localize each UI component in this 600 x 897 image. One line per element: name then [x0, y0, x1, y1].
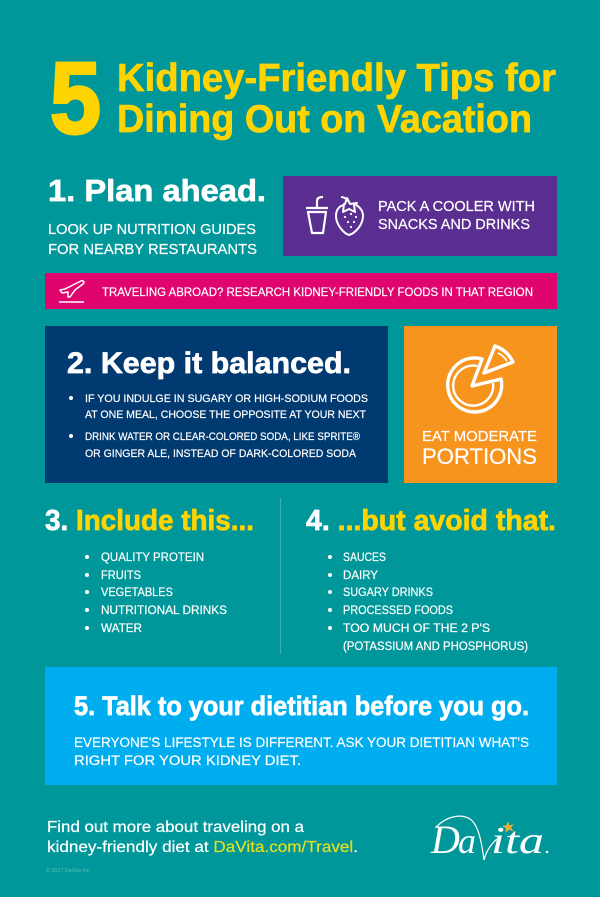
- body: RIGHT FOR YOUR KIDNEY DIET.: [74, 753, 301, 768]
- body: EVERYONE'S LIFESTYLE IS DIFFERENT. ASK YOUR DIETITIAN WHAT'S: [74, 735, 529, 750]
- heading: 4. ...but avoid that.: [306, 505, 556, 537]
- icon: star: [502, 821, 514, 833]
- copyright: © 2017 DaVita Inc.: [46, 867, 91, 874]
- list: WATER: [101, 623, 142, 635]
- list: PROCESSED FOODS: [343, 605, 453, 617]
- list: VEGETABLES: [101, 587, 173, 599]
- footer call to action: [47, 819, 358, 856]
- tip 1 text: 1. Plan ahead.: [48, 173, 266, 208]
- bullet list: IF YOU INDULGE IN SUGARY OR HIGH-SODIUM FOODS: [85, 393, 368, 405]
- label: [422, 429, 537, 469]
- label: PORTIONS: [422, 444, 537, 469]
- bullet list: DRINK WATER OR CLEAR-COLORED SODA, LIKE SPRITE®: [85, 431, 361, 443]
- panel: keep it balanced: [45, 326, 388, 483]
- panel text: SNACKS AND DRINKS: [378, 217, 530, 233]
- list: QUALITY PROTEIN: [101, 552, 204, 564]
- panel text: PACK A COOLER WITH: [378, 199, 535, 215]
- banner: traveling abroad: [45, 273, 557, 309]
- bullet list: OR GINGER ALE, INSTEAD OF DARK-COLORED SODA: [85, 448, 356, 460]
- tip 1 text: LOOK UP NUTRITION GUIDES: [48, 222, 256, 238]
- list: [85, 552, 227, 635]
- tip 1 text: FOR NEARBY RESTAURANTS: [48, 242, 257, 258]
- title: Dining Out on Vacation: [117, 98, 532, 141]
- list: FRUITS: [101, 570, 141, 582]
- bullet list: [69, 393, 368, 460]
- tip 1 text: [48, 173, 266, 258]
- title: 5: [50, 43, 101, 155]
- logo: DaVita: D: [430, 817, 460, 862]
- logo: DaVita: [430, 816, 548, 862]
- list: SAUCES: [343, 552, 386, 564]
- logo: DaVita: a: [458, 821, 476, 861]
- heading: 5. Talk to your dietitian before you go.: [74, 691, 529, 721]
- tip 4: avoid that: [306, 505, 556, 653]
- list: NUTRITIONAL DRINKS: [101, 605, 227, 617]
- panel: talk to your dietitian: [45, 667, 557, 785]
- banner: traveling abroad: TRAVELING ABROAD? RESEARCH KIDNEY-FRIENDLY FOODS IN THAT REGION: [102, 286, 533, 299]
- body: [74, 735, 529, 768]
- icon: drink cup: [306, 197, 328, 233]
- icon: strawberry: [336, 197, 363, 235]
- bullet list: AT ONE MEAL, CHOOSE THE OPPOSITE AT YOUR NEXT: [85, 409, 366, 421]
- footer call to action: kidney-friendly diet at DaVita.com/Travel .: [47, 839, 358, 856]
- title: [50, 43, 556, 155]
- list: TOO MUCH OF THE 2 P'S: [343, 623, 490, 635]
- list: [328, 552, 528, 653]
- list: SUGARY DRINKS: [343, 587, 433, 599]
- logo: DaVita: ita: [491, 820, 544, 862]
- panel: eat moderate portions: [404, 326, 557, 483]
- label: EAT MODERATE: [422, 429, 537, 445]
- title: Kidney-Friendly Tips for: [117, 57, 556, 100]
- heading: 3. Include this...: [45, 505, 254, 537]
- icon: pizza: [448, 346, 513, 412]
- list: (POTASSIUM AND PHOSPHORUS): [343, 641, 528, 653]
- panel: pack a cooler: [283, 176, 557, 256]
- footer call to action: Find out more about traveling on a: [47, 819, 304, 836]
- heading: 2. Keep it balanced.: [67, 347, 351, 380]
- panel text: [378, 199, 535, 233]
- list: DAIRY: [343, 570, 378, 582]
- icon: airplane: [59, 281, 84, 302]
- tip 3: include this: [45, 505, 254, 635]
